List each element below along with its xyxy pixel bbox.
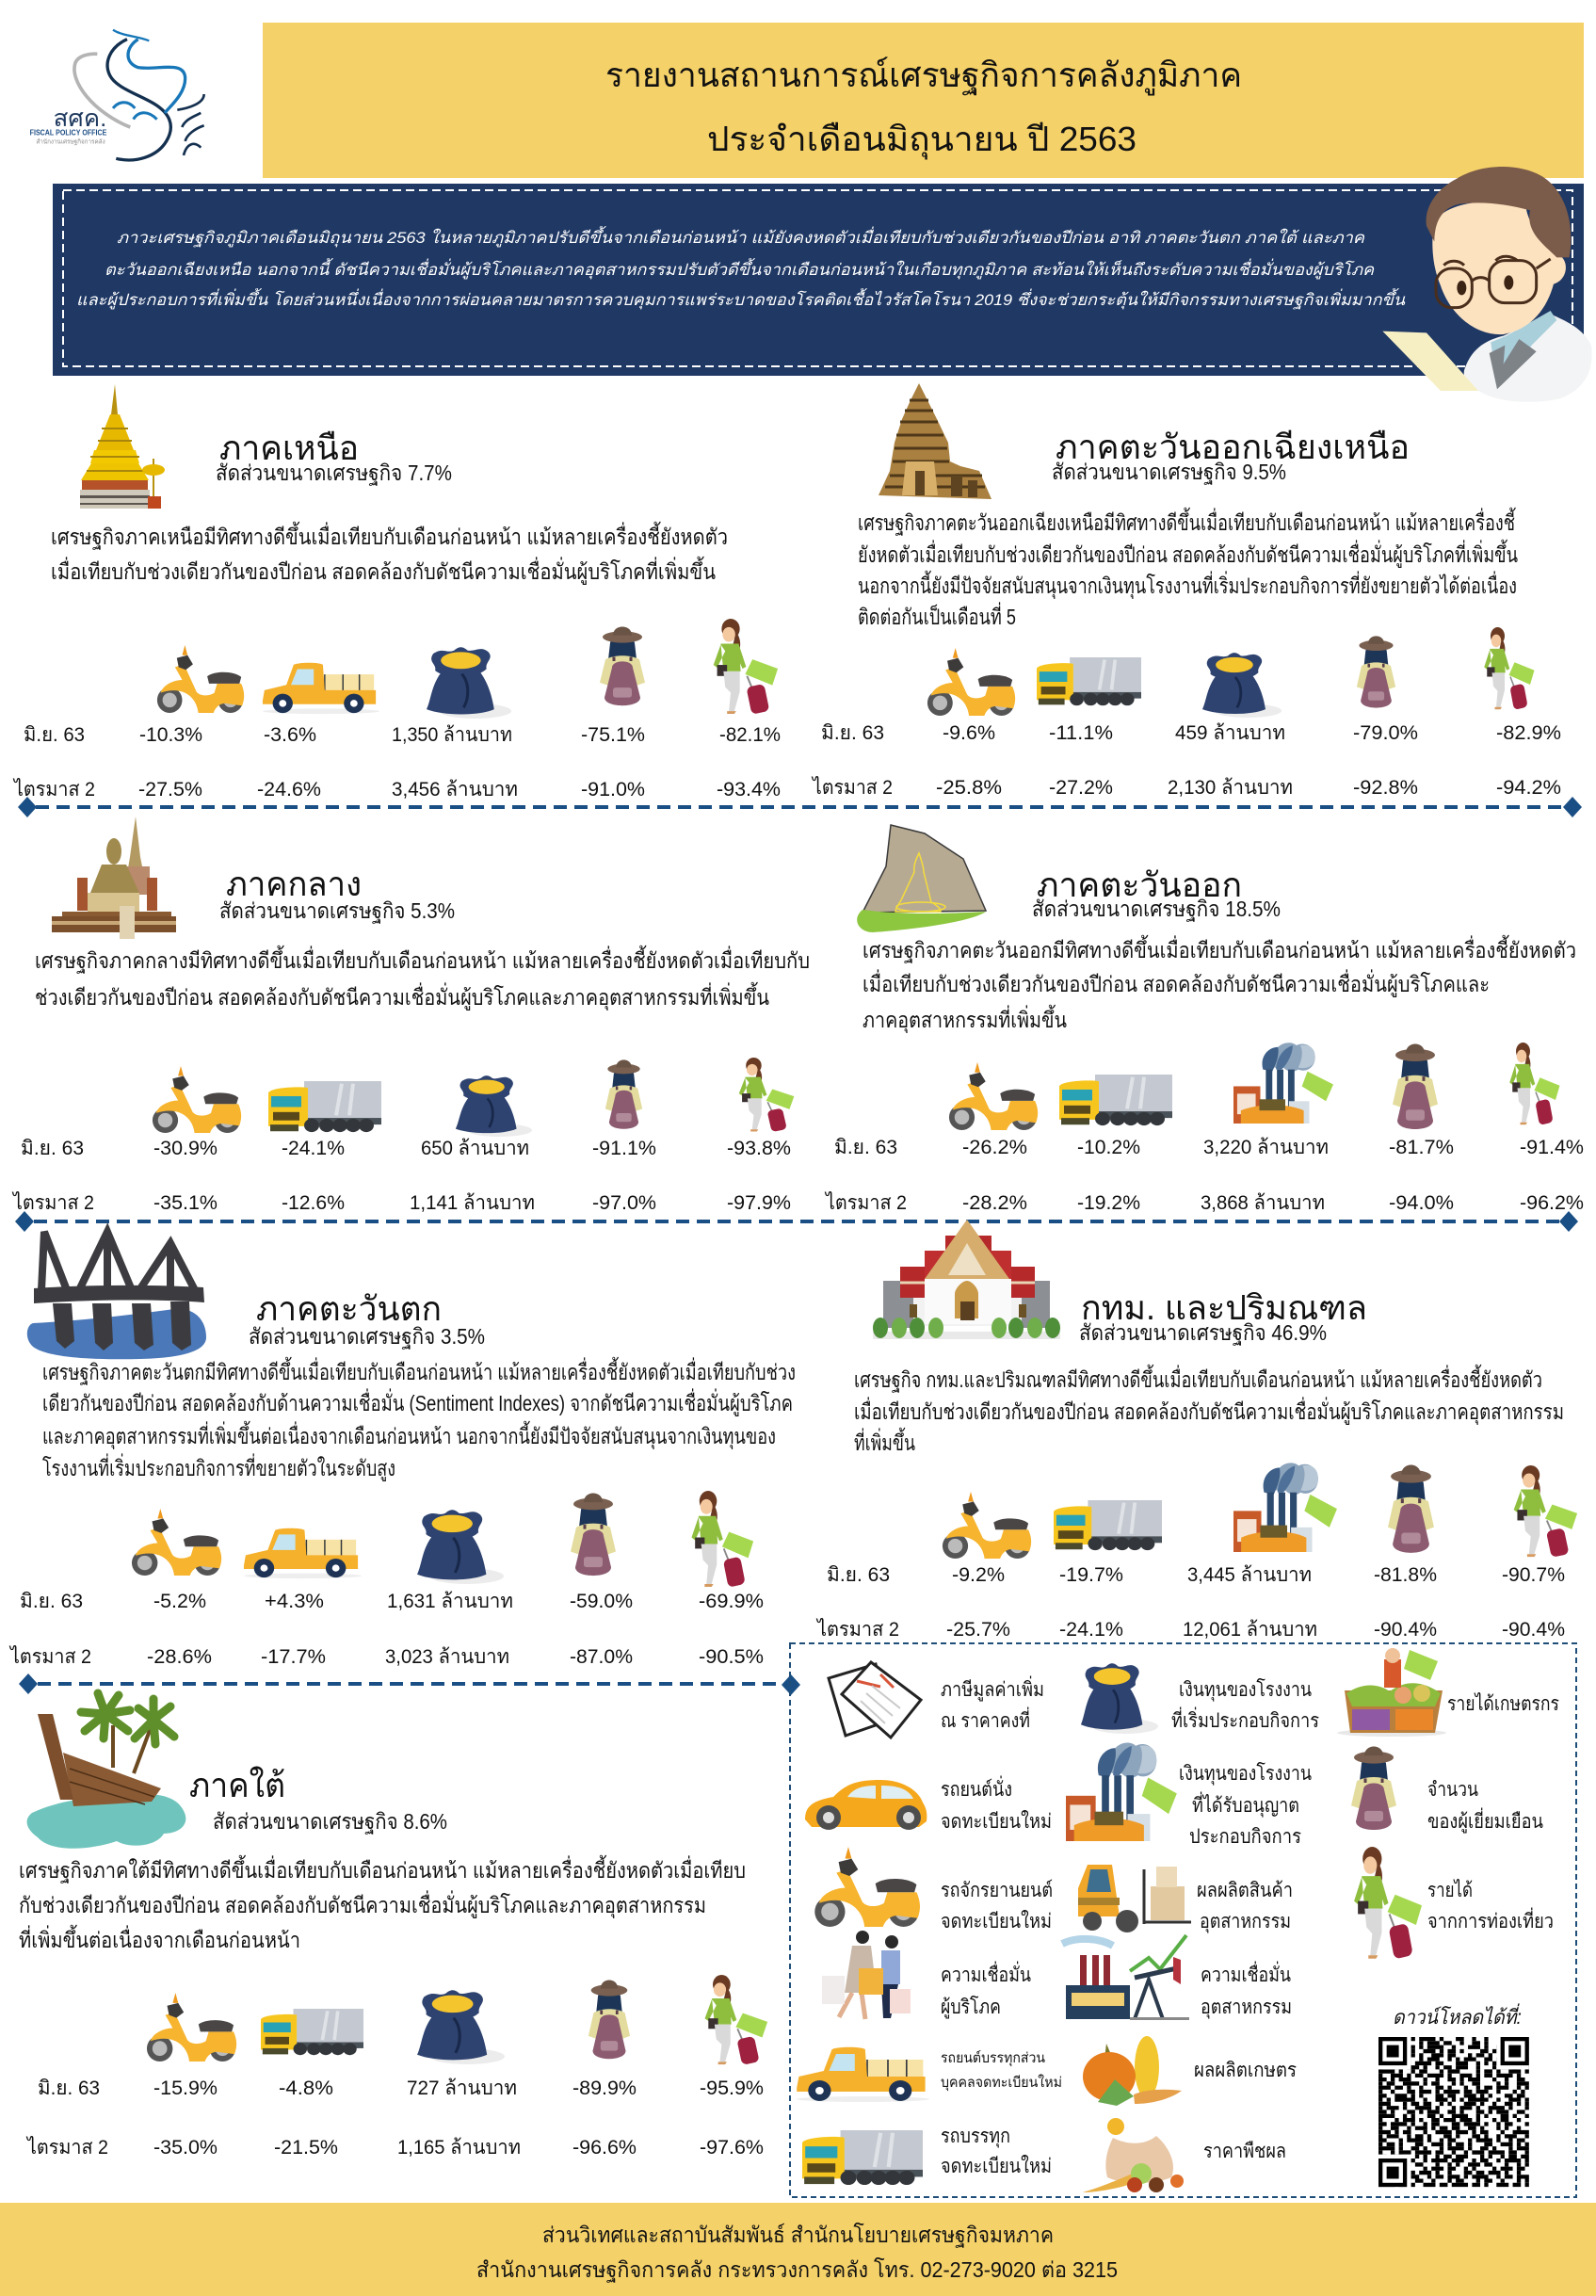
values: quarter 2 bbox=[815, 1618, 1565, 1641]
heading: central: ภาคกลาง bbox=[226, 865, 362, 903]
economic share: สัดส่วนขนาดเศรษฐกิจ 5.3% bbox=[219, 898, 455, 924]
values: quarter 2: 3,456 ล้านบาท bbox=[392, 779, 518, 800]
footer: ส่วนวิเทศและสถาบันสัมพันธ์ สำนักนโยบายเศรษฐกิจมหภาค bbox=[542, 2223, 1054, 2248]
icon: capital bag bbox=[417, 1510, 504, 1584]
values: June: -3.6% bbox=[264, 724, 316, 746]
panel: legend bbox=[790, 1643, 1576, 2197]
values: quarter 2: -27.2% bbox=[1049, 777, 1113, 799]
legend: new motorcycles bbox=[941, 1879, 1053, 1932]
icon: truck bbox=[1059, 1075, 1172, 1125]
icon: pickup bbox=[244, 1528, 362, 1578]
values: quarter 2: -96.6% bbox=[572, 2137, 637, 2159]
icon: truck bbox=[802, 2130, 923, 2185]
illustration: bridge bbox=[27, 1232, 206, 1359]
values: June: -75.1% bbox=[581, 724, 645, 746]
legend: tourism income bbox=[1427, 1879, 1554, 1932]
legend: new factory capital: เงินทุนของโรงงาน bbox=[1179, 1678, 1312, 1702]
values: quarter 2: -24.1% bbox=[1059, 1619, 1123, 1641]
text block bbox=[35, 946, 810, 1011]
economic share: สัดส่วนขนาดเศรษฐกิจ 18.5% bbox=[1032, 897, 1281, 922]
text block: เมื่อเทียบกับช่วงเดียวกันของปีก่อน สอดคล้องกับดัชนีความเชื่อมั่นผู้บริโภคที่เพิ่มขึ้น bbox=[51, 557, 716, 585]
intro panel: ตะวันออกเฉียงเหนือ นอกจากนี้ ดัชนีความเชื่อมั่นผู้บริโภคและภาคอุตสาหกรรมปรับตัวดีขึ้นจากเดือนก่อนหน้าในเกือบทุกภูมิภาค สะท้อนให้เห็นถึงระดับความเชื่อมั่นของผู้บริโภค bbox=[105, 257, 1375, 280]
icon: capital bag bbox=[427, 647, 511, 719]
text block: ติดต่อกันเป็นเดือนที่ 5 bbox=[858, 602, 1016, 629]
icon: tax documents bbox=[829, 1662, 921, 1738]
values: quarter 2: -35.0% bbox=[153, 2137, 218, 2159]
values: June: 1,350 ล้านบาท bbox=[392, 724, 512, 746]
icon: backpacker bbox=[1393, 1043, 1438, 1129]
legend: industrial output: อุตสาหกรรม bbox=[1200, 1911, 1291, 1933]
values: quarter 2: -90.4% bbox=[1502, 1619, 1565, 1641]
values: June: -82.1% bbox=[719, 724, 781, 746]
icon: backpacker bbox=[571, 1493, 616, 1576]
footer: สำนักงานเศรษฐกิจการคลัง กระทรวงการคลัง โทร. 02-273-9020 ต่อ 3215 bbox=[476, 2257, 1118, 2283]
header: logo: FISCAL POLICY OFFICE bbox=[30, 128, 107, 137]
icon: industry and oil bbox=[1062, 1935, 1189, 2020]
values: June: -4.8% bbox=[279, 2078, 333, 2099]
legend: VAT: ณ ราคาคงที่ bbox=[941, 1706, 1030, 1732]
values: quarter 2: -35.1% bbox=[153, 1192, 218, 1214]
footer bbox=[0, 2203, 1596, 2296]
legend: licensed factory capital: เงินทุนของโรงงาน bbox=[1179, 1762, 1312, 1786]
values: June: 650 ล้านบาท bbox=[421, 1138, 529, 1159]
economic share: สัดส่วนขนาดเศรษฐกิจ 9.5% bbox=[1052, 460, 1286, 485]
legend: new trucks: รถบรรทุก bbox=[941, 2126, 1010, 2148]
text block: ที่เพิ่มขึ้น bbox=[854, 1428, 915, 1455]
header: logo bbox=[30, 30, 204, 160]
caption: download: ดาวน์โหลดได้ที่: bbox=[1393, 2003, 1522, 2029]
values: June: -19.7% bbox=[1059, 1564, 1123, 1586]
header: title band: ประจำเดือนมิถุนายน ปี 2563 bbox=[707, 120, 1137, 160]
values: quarter 2: -90.5% bbox=[699, 1646, 764, 1668]
legend: industrial confidence: อุตสาหกรรม bbox=[1201, 1997, 1292, 2019]
intro panel: และผู้ประกอบการที่เพิ่มขึ้น โดยส่วนหนึ่งเนื่องจากการผ่อนคลายมาตรการควบคุมการแพร่ระบาดของโรคติดเชื้อไวรัสโคโรนา 2019 ซึ่งจะช่วยกระตุ้นให้มีกิจกรรมทางเศรษฐกิจเพิ่มมากขึ้น bbox=[76, 287, 1405, 310]
legend: VAT bbox=[941, 1675, 1044, 1732]
values: quarter 2: -92.8% bbox=[1353, 777, 1418, 799]
values: June bbox=[827, 1564, 1565, 1586]
legend: consumer confidence bbox=[941, 1961, 1031, 2019]
legend: VAT: ภาษีมูลค่าเพิ่ม bbox=[941, 1675, 1044, 1702]
divider 2 bbox=[15, 1211, 1578, 1232]
values: June: มิ.ย. 63 bbox=[834, 1137, 897, 1158]
values: quarter 2: -87.0% bbox=[570, 1646, 633, 1668]
icon: backpacker bbox=[605, 1059, 642, 1129]
values: June: -59.0% bbox=[570, 1591, 633, 1612]
legend: new private pickups: รถยนต์บรรทุกส่วน bbox=[941, 2050, 1045, 2067]
values: June bbox=[821, 722, 1561, 744]
values: quarter 2: -94.2% bbox=[1496, 777, 1561, 799]
values: quarter 2 bbox=[811, 776, 1561, 799]
values: June bbox=[38, 2078, 764, 2099]
icon: passenger car bbox=[805, 1780, 927, 1830]
icon: traveller bbox=[1484, 627, 1535, 710]
values: quarter 2: -28.6% bbox=[147, 1646, 212, 1668]
header: logo: สศค. bbox=[54, 105, 106, 132]
illustration: stupa bbox=[80, 384, 165, 509]
text block bbox=[854, 1365, 1564, 1455]
values: June: -9.2% bbox=[952, 1564, 1005, 1586]
intro panel: ภาวะเศรษฐกิจภูมิภาคเดือนมิถุนายน 2563 ในหลายภูมิภาคปรับดีขึ้นจากเดือนก่อนหน้า แม้ยังคงหดตัวเมื่อเทียบกับช่วงเดียวกันของปีก่อน อาทิ ภาคตะวันตก ภาคใต้ และภาค bbox=[117, 225, 1365, 248]
icon: backpacker bbox=[1351, 1746, 1396, 1830]
values: June: -5.2% bbox=[153, 1591, 206, 1612]
legend: new trucks bbox=[941, 2126, 1052, 2177]
economic share: สัดส่วนขนาดเศรษฐกิจ 46.9% bbox=[1079, 1320, 1327, 1346]
icon: capital bag bbox=[456, 1075, 532, 1137]
text block bbox=[51, 522, 728, 585]
values: June bbox=[24, 724, 781, 746]
values: June: -30.9% bbox=[153, 1138, 218, 1159]
icon: capital bag bbox=[417, 1990, 505, 2064]
panel: northern region bbox=[12, 384, 781, 800]
values: June: -69.9% bbox=[699, 1591, 764, 1612]
values: quarter 2: ไตรมาส 2 bbox=[815, 1618, 899, 1641]
icon: capital bag bbox=[1081, 1663, 1158, 1734]
icon: backpacker bbox=[588, 1980, 630, 2059]
legend: consumer confidence: ความเชื่อมั่น bbox=[941, 1961, 1031, 1986]
values: June: -79.0% bbox=[1353, 722, 1418, 744]
icon: traveller bbox=[691, 1491, 753, 1588]
values: June: 1,631 ล้านบาท bbox=[387, 1591, 513, 1612]
values: June: มิ.ย. 63 bbox=[821, 722, 884, 744]
values: quarter 2 bbox=[11, 1191, 791, 1214]
heading: Bangkok: กทม. และปริมณฑล bbox=[1081, 1288, 1367, 1327]
text block: ภาคอุตสาหกรรมที่เพิ่มขึ้น bbox=[862, 1005, 1067, 1033]
values: quarter 2: ไตรมาส 2 bbox=[12, 778, 95, 800]
icon: traveller bbox=[739, 1058, 794, 1132]
text block: เดียวกันของปีก่อน สอดคล้องกับด้านความเชื่อมั่น (Sentiment Indexes) จากดัชนีความเชื่อมั่นผู้บริโภค bbox=[42, 1388, 793, 1416]
header: title band: รายงานสถานการณ์เศรษฐกิจการคลังภูมิภาค bbox=[605, 56, 1242, 96]
legend: new passenger cars bbox=[941, 1775, 1052, 1833]
values: June: -24.1% bbox=[282, 1138, 345, 1159]
values: quarter 2: -94.0% bbox=[1389, 1192, 1454, 1214]
text block: เศรษฐกิจภาคเหนือมีทิศทางดีขึ้นเมื่อเทียบกับเดือนก่อนหน้า แม้หลายเครื่องชี้ยังหดตัว bbox=[51, 522, 728, 550]
icon: forklift bbox=[1078, 1865, 1191, 1932]
values: June: มิ.ย. 63 bbox=[827, 1564, 890, 1586]
values: quarter 2: ไตรมาส 2 bbox=[11, 1191, 94, 1214]
values: quarter 2: -90.4% bbox=[1374, 1619, 1437, 1641]
panel: central region bbox=[11, 817, 810, 1214]
icon: traveller bbox=[1514, 1465, 1577, 1558]
text block bbox=[862, 935, 1576, 1033]
values: quarter 2: -97.9% bbox=[727, 1192, 791, 1214]
values: June: -91.4% bbox=[1520, 1137, 1584, 1158]
values: June bbox=[21, 1138, 791, 1159]
heading: west: ภาคตะวันตก bbox=[256, 1289, 442, 1328]
heading: northeast: ภาคตะวันออกเฉียงเหนือ bbox=[1056, 428, 1410, 466]
legend: new motorcycles: จดทะเบียนใหม่ bbox=[941, 1910, 1052, 1932]
icon: pickup bbox=[263, 663, 379, 714]
header: title band bbox=[263, 23, 1584, 178]
values: quarter 2: -21.5% bbox=[274, 2137, 338, 2159]
icon: backpacker bbox=[1388, 1464, 1434, 1553]
values: quarter 2: -93.4% bbox=[717, 779, 781, 800]
legend: new factory capital: ที่เริ่มประกอบกิจการ bbox=[1171, 1706, 1319, 1732]
illustration: marble temple bbox=[873, 1220, 1060, 1339]
panel: southern region bbox=[19, 1693, 767, 2159]
values: June: -81.8% bbox=[1374, 1564, 1437, 1586]
values: June: -89.9% bbox=[572, 2078, 637, 2099]
divider 3 bbox=[19, 1673, 800, 1695]
text block: โรงงานที่เริ่มประกอบกิจการที่ขยายตัวในระดับสูง bbox=[42, 1453, 395, 1481]
values: quarter 2: -19.2% bbox=[1077, 1192, 1140, 1214]
icon: farmer market bbox=[1337, 1648, 1446, 1737]
panel: eastern region bbox=[824, 825, 1584, 1214]
text block: ช่วงเดียวกันของปีก่อน สอดคล้องกับดัชนีความเชื่อมั่นผู้บริโภคและภาคอุตสาหกรรมที่เพิ่มขึ้น bbox=[35, 982, 769, 1011]
icon: scooter bbox=[132, 1509, 221, 1576]
icon: scooter bbox=[147, 1993, 236, 2062]
values: quarter 2 bbox=[12, 778, 781, 800]
text block: เศรษฐกิจภาคใต้มีทิศทางดีขึ้นเมื่อเทียบกับเดือนก่อนหน้า แม้หลายเครื่องชี้ยังหดตัวเมื่อเทียบ bbox=[19, 1855, 746, 1884]
legend: tourism income: รายได้ bbox=[1427, 1879, 1473, 1901]
icon: scooter bbox=[153, 1066, 241, 1133]
legend: new factory capital bbox=[1171, 1678, 1319, 1732]
panel: western region bbox=[8, 1232, 796, 1668]
text block: กับช่วงเดียวกันของปีก่อน สอดคล้องกับดัชนีความเชื่อมั่นผู้บริโภคและภาคอุตสาหกรรม bbox=[19, 1890, 706, 1918]
values: quarter 2: -27.5% bbox=[138, 779, 202, 800]
values: quarter 2: -91.0% bbox=[581, 779, 645, 800]
legend: industrial output bbox=[1197, 1880, 1293, 1933]
values: June: -15.9% bbox=[153, 2078, 218, 2099]
values: June: -10.3% bbox=[139, 724, 202, 746]
heading: east: ภาคตะวันออก bbox=[1037, 865, 1242, 904]
values: quarter 2: -25.8% bbox=[936, 777, 1002, 799]
values: quarter 2: -24.6% bbox=[257, 779, 321, 800]
legend: new passenger cars: รถยนต์นั่ง bbox=[941, 1775, 1012, 1801]
economic share: สัดส่วนขนาดเศรษฐกิจ 8.6% bbox=[213, 1809, 447, 1835]
legend: tourism income: จากการท่องเที่ยว bbox=[1427, 1907, 1554, 1932]
values: June: มิ.ย. 63 bbox=[38, 2078, 100, 2099]
values: June: -81.7% bbox=[1389, 1137, 1454, 1158]
heading: south: ภาคใต้ bbox=[189, 1766, 285, 1804]
values: quarter 2: ไตรมาส 2 bbox=[25, 2136, 108, 2159]
values: quarter 2: -96.2% bbox=[1520, 1192, 1584, 1214]
icon: traveller bbox=[714, 619, 778, 715]
values: June: มิ.ย. 63 bbox=[24, 724, 85, 746]
legend: consumer confidence: ผู้บริโภค bbox=[941, 1996, 1001, 2019]
icon: scooter bbox=[157, 645, 244, 713]
values: quarter 2: -25.7% bbox=[946, 1619, 1010, 1641]
text block bbox=[42, 1357, 796, 1481]
values: June: 3,220 ล้านบาท bbox=[1203, 1137, 1329, 1158]
icon: scooter bbox=[949, 1062, 1038, 1130]
header: logo: สำนักงานเศรษฐกิจการคลัง bbox=[36, 137, 105, 145]
values: June: -10.2% bbox=[1077, 1137, 1140, 1158]
icon: scooter bbox=[814, 1847, 920, 1927]
values: quarter 2: -12.6% bbox=[282, 1192, 345, 1214]
legend: new private pickups: บุคคลจดทะเบียนใหม่ bbox=[941, 2074, 1062, 2092]
legend: licensed factory capital: ประกอบกิจการ bbox=[1189, 1826, 1301, 1848]
economic share: สัดส่วนขนาดเศรษฐกิจ 3.5% bbox=[249, 1324, 485, 1350]
text block: และภาคอุตสาหกรรมที่เพิ่มขึ้นต่อเนื่องจากเดือนก่อนหน้า นอกจากนี้ยังมีปัจจัยสนับสนุนจากเงินทุนของ bbox=[42, 1421, 776, 1449]
values: June: 459 ล้านบาท bbox=[1175, 722, 1285, 744]
values: June: -11.1% bbox=[1049, 722, 1113, 744]
icon: scooter bbox=[943, 1492, 1031, 1559]
values: quarter 2: 12,061 ล้านบาท bbox=[1183, 1619, 1317, 1641]
legend: industrial confidence: ความเชื่อมั่น bbox=[1201, 1961, 1291, 1986]
legend: visitors bbox=[1427, 1779, 1543, 1834]
values: quarter 2: ไตรมาส 2 bbox=[8, 1645, 91, 1668]
icon: shoppers bbox=[822, 1931, 911, 2019]
values: June: -90.7% bbox=[1502, 1564, 1565, 1586]
legend: new passenger cars: จดทะเบียนใหม่ bbox=[941, 1810, 1052, 1833]
values: June: -93.8% bbox=[727, 1138, 791, 1159]
illustration: doctor bbox=[1382, 167, 1592, 402]
illustration: khmer temple bbox=[879, 383, 991, 499]
values: quarter 2: 2,130 ล้านบาท bbox=[1168, 777, 1293, 799]
legend: industrial output: ผลผลิตสินค้า bbox=[1197, 1880, 1293, 1901]
icon: scooter bbox=[927, 648, 1015, 716]
illustration: buddha temple bbox=[52, 817, 176, 939]
intro panel bbox=[53, 184, 1584, 376]
text block: เศรษฐกิจภาคกลางมีทิศทางดีขึ้นเมื่อเทียบกับเดือนก่อนหน้า แม้หลายเครื่องชี้ยังหดตัวเมื่อเทียบกับ bbox=[35, 946, 810, 974]
values: quarter 2: ไตรมาส 2 bbox=[824, 1191, 907, 1214]
values: June: 3,445 ล้านบาท bbox=[1187, 1564, 1312, 1586]
values: June: มิ.ย. 63 bbox=[20, 1591, 83, 1612]
values: June bbox=[834, 1137, 1584, 1158]
icon: truck bbox=[268, 1081, 381, 1132]
legend: industrial confidence bbox=[1201, 1961, 1292, 2019]
icon: truck bbox=[1037, 657, 1141, 705]
illustration: boat and palms bbox=[27, 1693, 185, 1849]
text block: ที่เพิ่มขึ้นต่อเนื่องจากเดือนก่อนหน้า bbox=[19, 1925, 300, 1952]
QR code bbox=[1378, 2037, 1529, 2187]
legend: new private pickups bbox=[941, 2050, 1062, 2092]
panel: northeastern region bbox=[811, 383, 1561, 799]
values: quarter 2: ไตรมาส 2 bbox=[811, 776, 893, 799]
values: quarter 2: -17.7% bbox=[261, 1646, 326, 1668]
text block bbox=[858, 508, 1518, 629]
icon: traveller bbox=[1509, 1043, 1559, 1125]
values: quarter 2: 1,141 ล้านบาท bbox=[410, 1192, 535, 1214]
values: quarter 2: -97.0% bbox=[592, 1192, 656, 1214]
legend: agricultural output: ผลผลิตเกษตร bbox=[1194, 2060, 1297, 2081]
values: quarter 2: 1,165 ล้านบาท bbox=[397, 2137, 521, 2159]
panel: Bangkok region bbox=[815, 1220, 1577, 1641]
heading: north: ภาคเหนือ bbox=[219, 428, 359, 467]
legend: new trucks: จดทะเบียนใหม่ bbox=[941, 2155, 1052, 2177]
values: June: มิ.ย. 63 bbox=[21, 1138, 84, 1159]
values: June: +4.3% bbox=[265, 1591, 324, 1612]
legend: licensed factory capital bbox=[1179, 1762, 1312, 1848]
text block: เมื่อเทียบกับช่วงเดียวกันของปีก่อน สอดคล้องกับดัชนีความเชื่อมั่นผู้บริโภคและ bbox=[862, 969, 1490, 997]
icon: truck bbox=[261, 2009, 363, 2055]
values: quarter 2 bbox=[25, 2136, 764, 2159]
legend: visitors: ของผู้เยี่ยมเยือน bbox=[1427, 1807, 1543, 1834]
values: June: -95.9% bbox=[700, 2078, 764, 2099]
economic share: สัดส่วนขนาดเศรษฐกิจ 7.7% bbox=[216, 461, 452, 486]
legend: licensed factory capital: ที่ได้รับอนุญาต bbox=[1192, 1791, 1299, 1818]
icon: pickup bbox=[797, 2047, 929, 2102]
icon: farm produce bbox=[1083, 2036, 1182, 2106]
icon: grain sack bbox=[1083, 2118, 1184, 2192]
values: quarter 2: 3,023 ล้านบาท bbox=[385, 1646, 509, 1668]
values: quarter 2: -97.6% bbox=[700, 2137, 764, 2159]
values: quarter 2 bbox=[824, 1191, 1584, 1214]
values: June: -82.9% bbox=[1496, 722, 1561, 744]
values: June bbox=[20, 1591, 764, 1612]
icon: traveller bbox=[1354, 1847, 1422, 1960]
values: June: -9.6% bbox=[943, 722, 995, 744]
legend: visitors: จำนวน bbox=[1427, 1779, 1478, 1801]
values: quarter 2: 3,868 ล้านบาท bbox=[1201, 1192, 1325, 1214]
legend: farm income: รายได้เกษตรกร bbox=[1447, 1692, 1559, 1715]
icon: backpacker bbox=[600, 626, 645, 705]
legend: crop prices: ราคาพืชผล bbox=[1203, 2141, 1286, 2162]
icon: backpacker bbox=[1357, 636, 1395, 708]
values: June: 727 ล้านบาท bbox=[407, 2078, 517, 2099]
icon: factory bbox=[1233, 1043, 1333, 1124]
icon: factory bbox=[1233, 1463, 1337, 1552]
icon: traveller bbox=[705, 1975, 767, 2065]
values: June: -26.2% bbox=[962, 1137, 1027, 1158]
values: June: -91.1% bbox=[592, 1138, 656, 1159]
divider 1 bbox=[18, 797, 1582, 817]
values: quarter 2: -28.2% bbox=[962, 1192, 1027, 1214]
text block bbox=[19, 1855, 746, 1952]
icon: truck bbox=[1054, 1500, 1162, 1550]
illustration: buddha rock bbox=[857, 825, 986, 932]
text block: เศรษฐกิจภาคตะวันตกมีทิศทางดีขึ้นเมื่อเทียบกับเดือนก่อนหน้า แม้หลายเครื่องชี้ยังหดตัวเมื่อเทียบกับช่วง bbox=[42, 1357, 796, 1385]
icon: capital bag bbox=[1202, 653, 1282, 718]
legend: new motorcycles: รถจักรยานยนต์ bbox=[941, 1879, 1053, 1901]
icon: factory bbox=[1066, 1742, 1177, 1841]
values: quarter 2 bbox=[8, 1645, 764, 1668]
